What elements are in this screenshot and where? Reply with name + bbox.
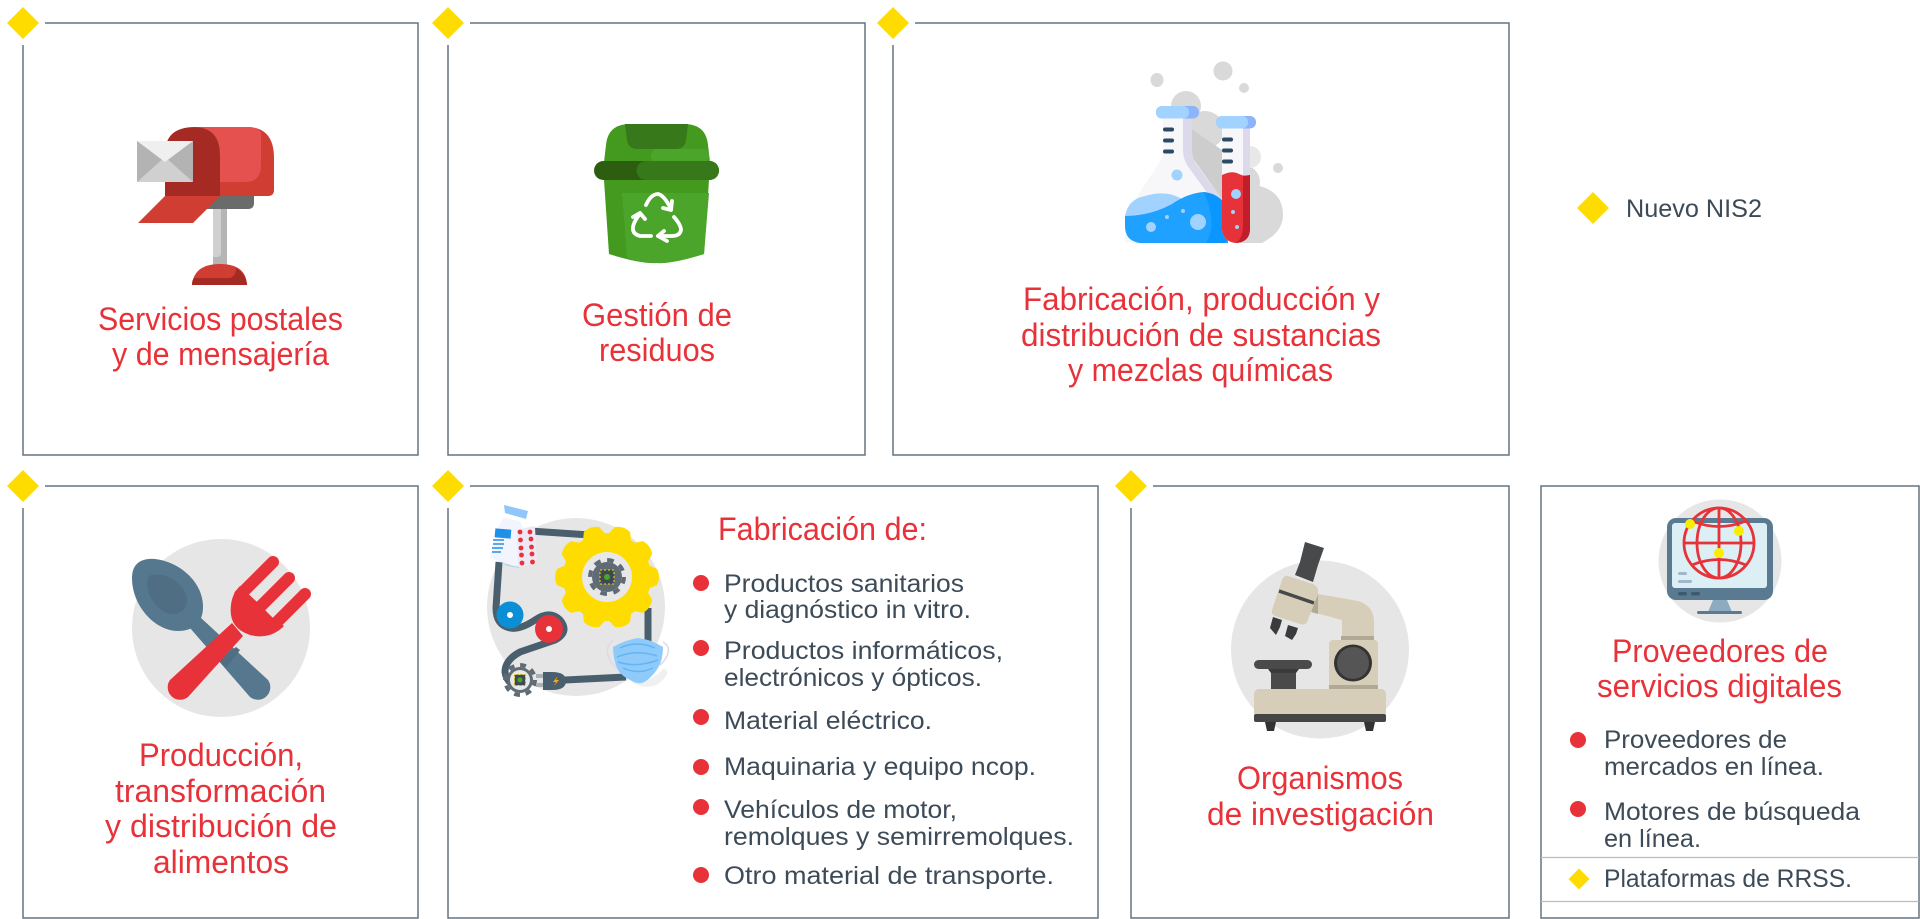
list: productos fabricados: y diagnóstico in vitro. xyxy=(724,596,971,624)
icon: mailbox xyxy=(137,127,274,285)
heading: sustancias químicas xyxy=(1021,281,1381,388)
highlighted row: plataformas de RRSS: Plataformas de RRSS. xyxy=(1604,865,1852,893)
icon: spoon and fork xyxy=(132,539,310,717)
panel: organismos de investigación xyxy=(1115,470,1509,918)
heading: alimentos xyxy=(105,737,337,880)
panel frame xyxy=(448,486,1098,918)
heading: gestión de residuos: residuos xyxy=(599,332,715,368)
icon: monitor with globe xyxy=(1658,500,1782,622)
heading: sustancias químicas: distribución de sustancias xyxy=(1021,317,1381,353)
list: productos fabricados xyxy=(693,570,1074,890)
list: productos fabricados: Productos sanitarios xyxy=(724,570,964,598)
heading: proveedores de servicios digitales: Proveedores de xyxy=(1612,633,1828,669)
heading: organismos de investigación: de investigación xyxy=(1207,796,1434,832)
new NIS2 diamond marker xyxy=(432,7,464,39)
icon: flask and test tube xyxy=(1125,62,1283,243)
list: productos fabricados: electrónicos y ópticos. xyxy=(724,664,982,692)
heading: organismos de investigación: Organismos xyxy=(1237,760,1403,796)
panel: proveedores de servicios digitales xyxy=(1541,486,1919,918)
list: proveedores xyxy=(1570,726,1860,853)
heading: fabricación de: Fabricación de: xyxy=(718,511,927,547)
list: productos fabricados: Vehículos de motor, xyxy=(724,796,957,824)
legend label: Nuevo NIS2 xyxy=(1626,195,1762,223)
heading: gestión de residuos xyxy=(582,297,732,368)
panel frame xyxy=(893,23,1509,455)
heading: proveedores de servicios digitales: servicios digitales xyxy=(1597,668,1842,704)
heading: alimentos: alimentos xyxy=(153,844,289,880)
highlighted row: plataformas de RRSS xyxy=(1541,858,1919,902)
icon: manufacturing chain xyxy=(487,505,668,696)
list: proveedores: mercados en línea. xyxy=(1604,753,1824,781)
panel frame xyxy=(23,23,418,455)
list: productos fabricados: Otro material de transporte. xyxy=(724,862,1054,890)
list: productos fabricados: Material eléctrico. xyxy=(724,707,932,735)
heading: sustancias químicas: Fabricación, producción y xyxy=(1023,281,1380,317)
heading: gestión de residuos: Gestión de xyxy=(582,297,732,333)
heading: alimentos: y distribución de xyxy=(105,808,337,844)
heading: alimentos: transformación xyxy=(115,773,326,809)
panel: alimentos xyxy=(7,470,418,918)
heading: proveedores de servicios digitales xyxy=(1597,633,1842,704)
panel: gestión de residuos xyxy=(432,7,865,455)
legend diamond xyxy=(1577,192,1609,224)
panel frame xyxy=(23,486,418,918)
list: proveedores: Proveedores de xyxy=(1604,726,1787,754)
panel: fabricación xyxy=(432,470,1098,918)
heading: alimentos: Producción, xyxy=(139,737,303,773)
panel frame xyxy=(1541,486,1919,918)
heading: sustancias químicas: y mezclas químicas xyxy=(1068,352,1333,388)
icon: microscope xyxy=(1231,542,1409,738)
panel frame xyxy=(448,23,865,455)
heading: organismos de investigación xyxy=(1207,760,1434,832)
icon: recycling bin xyxy=(594,124,719,263)
list: productos fabricados: Maquinaria y equipo ncop. xyxy=(724,753,1036,781)
list: productos fabricados: Productos informáticos, xyxy=(724,637,1003,665)
new NIS2 diamond marker xyxy=(877,7,909,39)
list: proveedores: en línea. xyxy=(1604,825,1701,853)
list: proveedores: Motores de búsqueda xyxy=(1604,798,1860,826)
panel: servicios postales xyxy=(7,7,418,455)
heading: servicios postales: y de mensajería xyxy=(112,336,329,372)
new NIS2 diamond marker xyxy=(1115,470,1147,502)
heading: servicios postales: Servicios postales xyxy=(98,301,343,337)
panel frame xyxy=(1131,486,1509,918)
new NIS2 diamond marker xyxy=(7,7,39,39)
new NIS2 diamond marker xyxy=(432,470,464,502)
panel: sustancias químicas xyxy=(877,7,1509,455)
heading: servicios postales xyxy=(98,301,343,372)
new NIS2 diamond marker xyxy=(7,470,39,502)
list: productos fabricados: remolques y semirremolques. xyxy=(724,823,1074,851)
legend: nuevo NIS2 xyxy=(1577,192,1762,224)
